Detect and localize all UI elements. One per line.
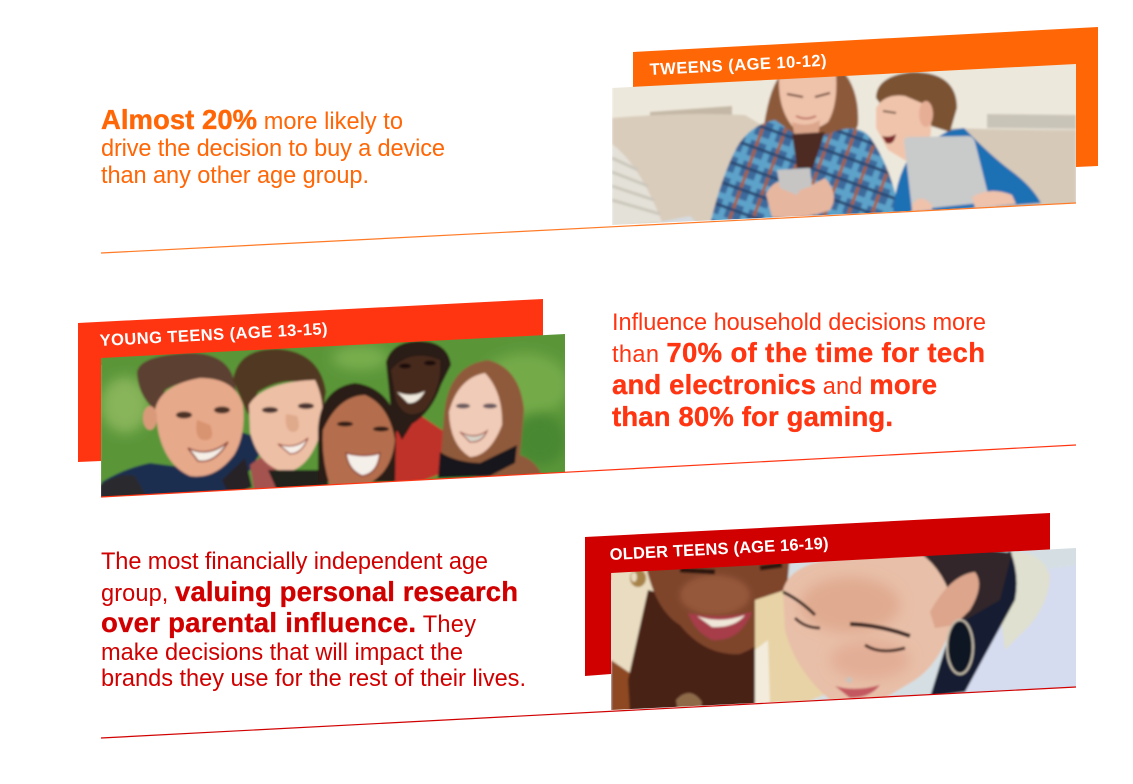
young teens underline [101, 445, 1076, 497]
tweens heading: TWEENS (AGE 10-12) [649, 52, 827, 79]
tweens text [101, 104, 445, 189]
young teens photo: five smiling teenagers [100, 330, 570, 500]
older teens text: brands they use for the rest of their lives. [101, 666, 526, 692]
tweens underline [101, 203, 1076, 253]
tweens photo: girl and boy on sofa with devices [612, 60, 1082, 230]
tweens text: Almost 20% more likely to [101, 104, 403, 135]
young teens text: than 70% of the time for tech [612, 337, 985, 368]
tweens text: than any other age group. [101, 163, 369, 189]
older teens text [101, 549, 526, 692]
young teens text: and electronics and more [612, 369, 937, 400]
panel: tweens [101, 27, 1098, 253]
young teens text: Influence household decisions more [612, 310, 986, 336]
panel: older teens [101, 513, 1080, 738]
older teens text: group, valuing personal research [101, 576, 518, 607]
older teens text: The most financially independent age [101, 549, 488, 575]
older teens text: make decisions that will impact the [101, 640, 463, 666]
older teens photo: two young women looking down [610, 545, 1080, 715]
young teens text: than 80% for gaming. [612, 401, 893, 432]
young teens text [612, 310, 986, 432]
older teens heading: OLDER TEENS (AGE 16-19) [609, 535, 829, 564]
older teens underline [101, 687, 1076, 738]
young teens colour band [78, 299, 543, 462]
panel: young teens [78, 299, 1076, 500]
older teens colour band [585, 513, 1050, 676]
young teens heading: YOUNG TEENS (AGE 13-15) [99, 320, 328, 350]
older teens text: over parental influence. They [101, 607, 476, 638]
tweens colour band [633, 27, 1098, 167]
tweens text: drive the decision to buy a device [101, 136, 445, 162]
